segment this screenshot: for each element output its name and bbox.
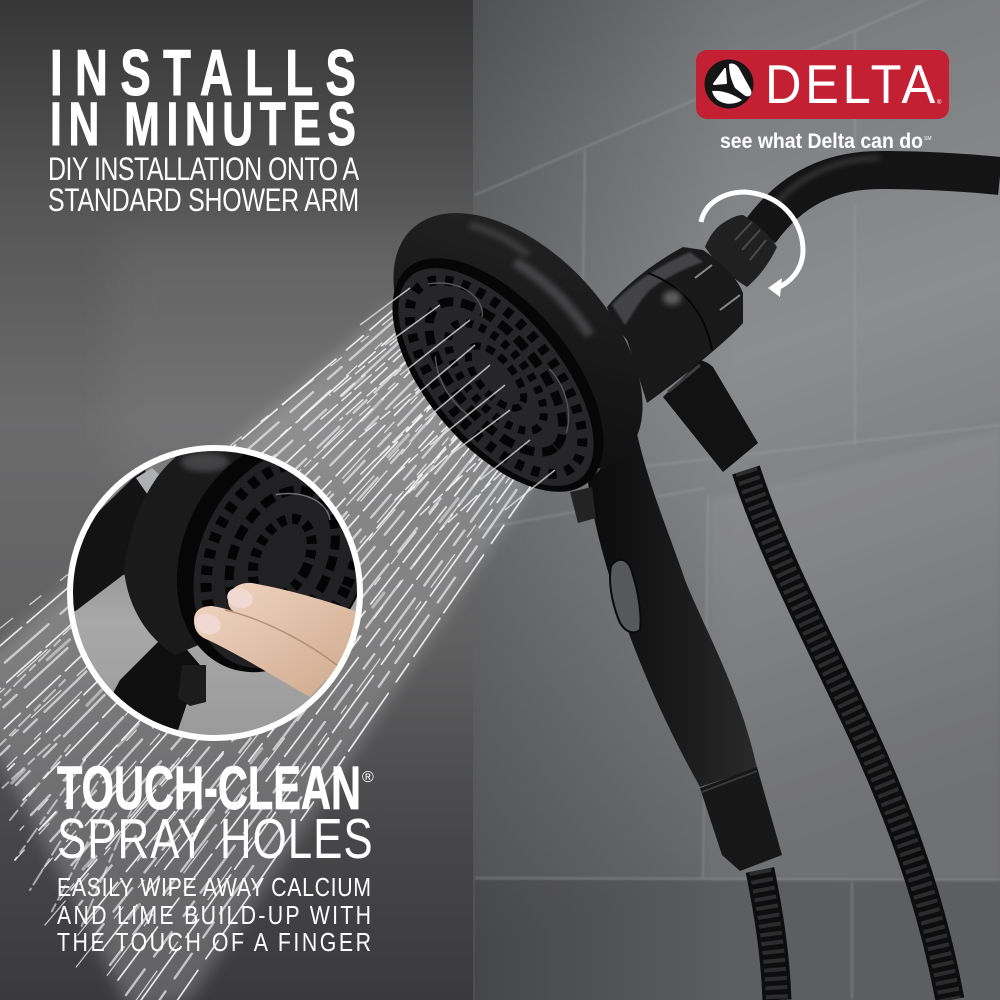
inset lever (178, 665, 206, 706)
heading: touch-clean spray holes: SPRAY HOLES (57, 806, 373, 870)
text: easily wipe away: THE TOUCH OF A FINGER (57, 928, 371, 958)
water spray (0, 295, 535, 1000)
inset shower bracket (73, 470, 147, 612)
inset handle (114, 642, 200, 730)
text: diy installation (48, 152, 360, 219)
logo black circle with white triangle (704, 60, 754, 108)
lower fingernail (195, 614, 221, 634)
heading: installs in minutes (50, 36, 356, 159)
swivel mount (607, 215, 777, 472)
heading: installs in minutes: IN MINUTES (50, 91, 356, 159)
finger crease (225, 610, 338, 666)
inset spray face (177, 454, 357, 672)
text: easily wipe away: AND LIME BUILD-UP WITH (57, 901, 371, 931)
logo: delta: ® (937, 99, 942, 106)
heading: touch-clean spray holes (57, 755, 374, 870)
icon: spray selector button (610, 560, 641, 632)
inset white ring (70, 448, 360, 738)
logo: delta: DELTA (765, 54, 936, 115)
upper fingernail (227, 588, 253, 608)
spray face with nozzles (363, 235, 629, 519)
shower arm (760, 158, 1000, 232)
rotation arrow icon (701, 192, 803, 297)
text: diy installation: STANDARD SHOWER ARM (48, 183, 359, 219)
left dark gradient panel (0, 0, 473, 1000)
icon: spray lever (570, 487, 596, 523)
inset head shell (124, 451, 244, 654)
hose (746, 470, 950, 1000)
heading: installs in minutes: INSTALLS (50, 36, 356, 109)
heading: touch-clean spray holes: TOUCH-CLEAN (57, 755, 361, 823)
handle (570, 430, 782, 871)
text: easily wipe away: EASILY WIPE AWAY CALCIUM (57, 873, 371, 903)
heading: touch-clean spray holes: ® (362, 769, 374, 786)
upper finger (228, 583, 358, 680)
logo: delta: see what Delta can do (720, 130, 923, 153)
logo: delta (696, 50, 949, 153)
shower head (346, 167, 690, 529)
logo: delta: SM (924, 136, 932, 142)
logo red badge (696, 50, 949, 119)
water streams over the head face (360, 288, 555, 510)
inset circle: touch-clean fingers (67, 445, 363, 741)
text: easily wipe away (57, 873, 371, 958)
lower finger (194, 606, 338, 697)
text: diy installation: DIY INSTALLATION ONTO A (48, 152, 360, 188)
